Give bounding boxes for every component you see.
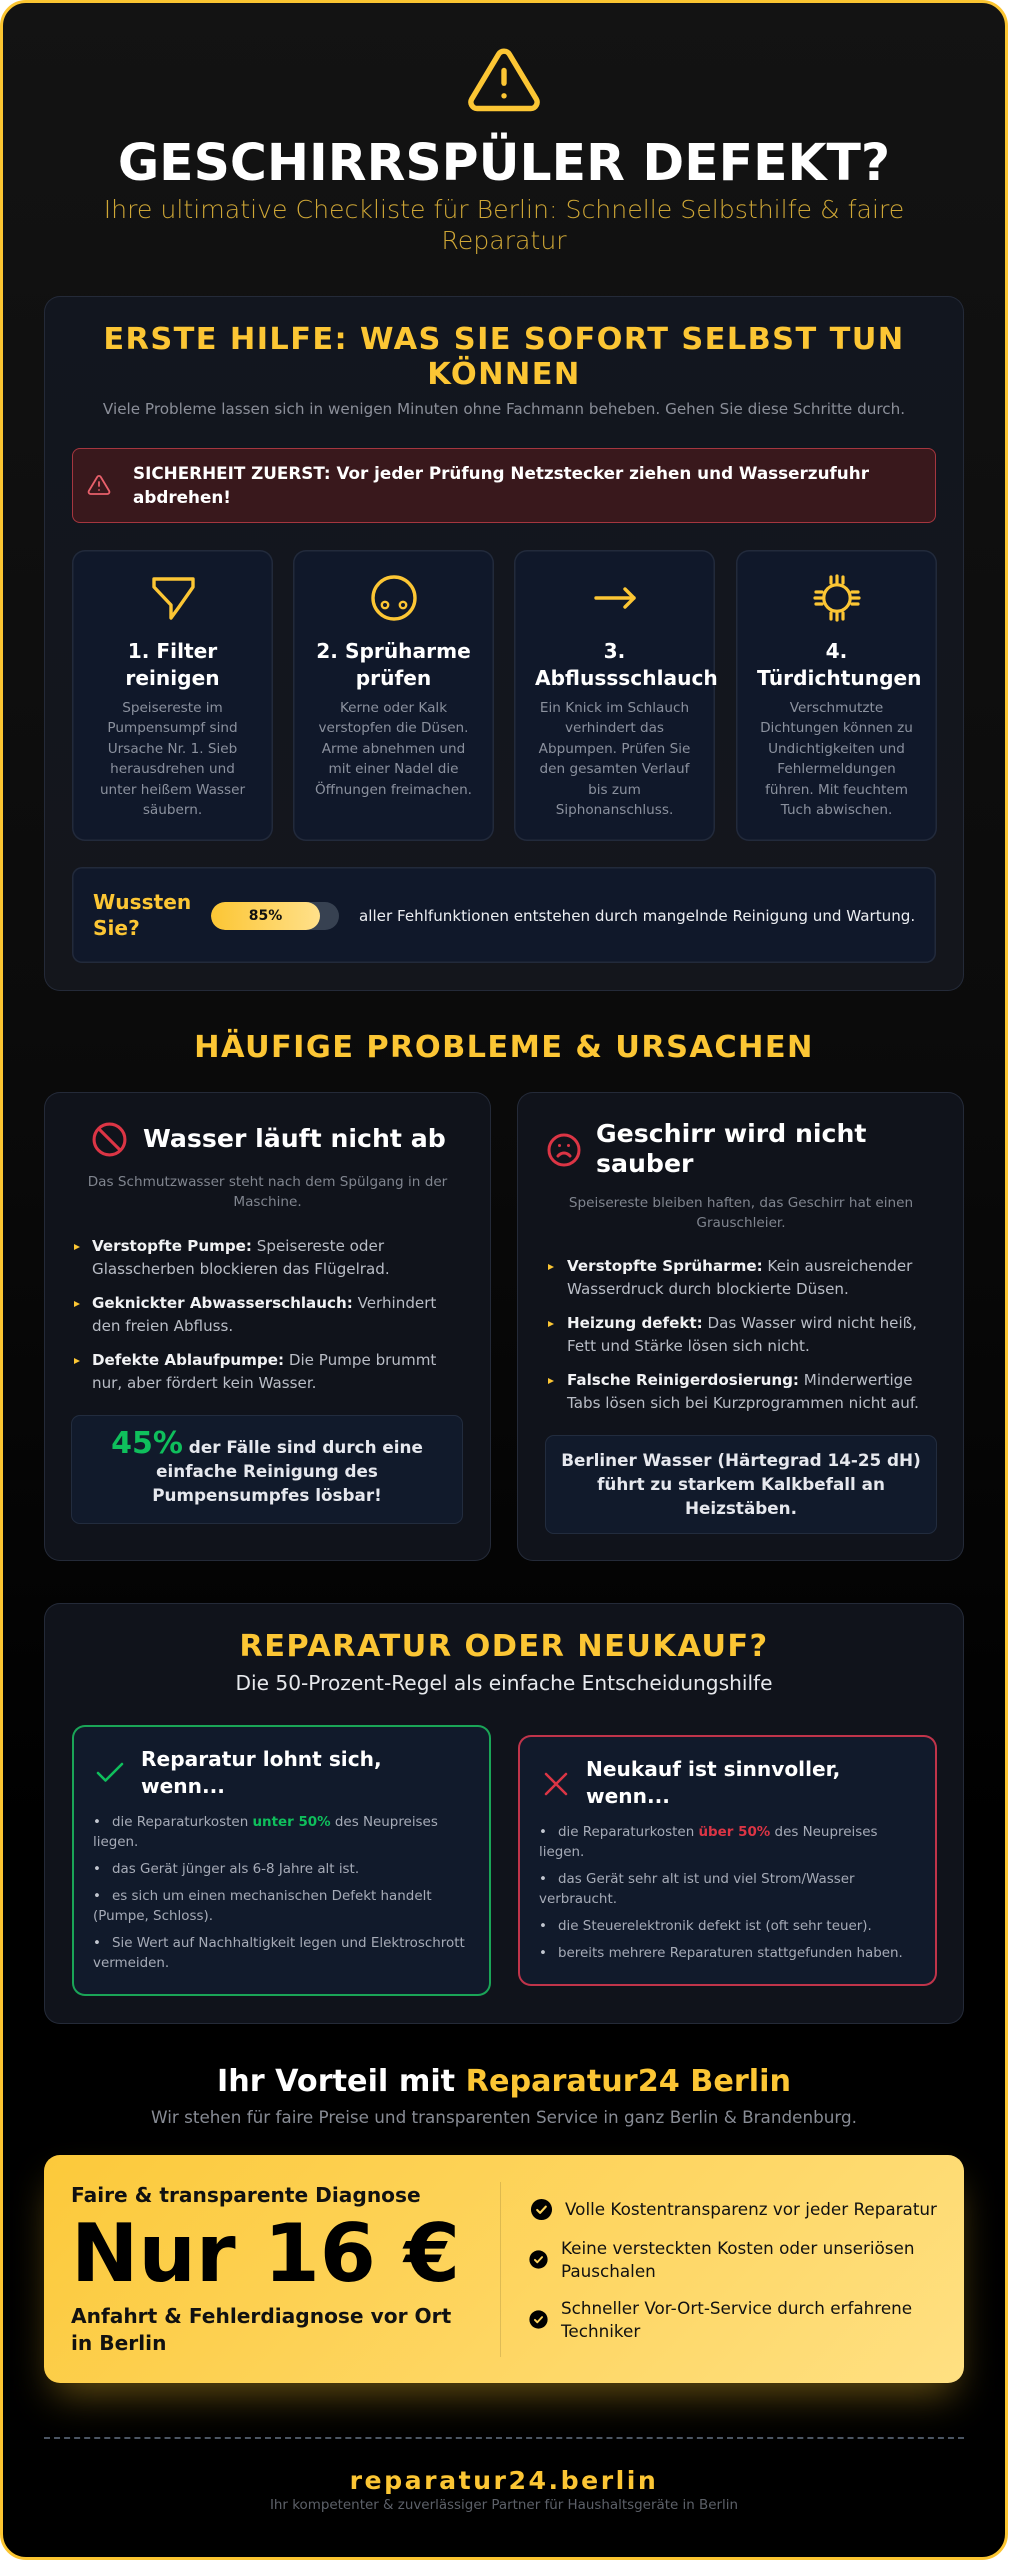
box: Neukauf ist sinnvoller [518,1735,937,1986]
criterion 1 [539,1825,877,1860]
price note: in Berlin [71,2330,166,2354]
cause list [548,1256,919,1412]
problem title: sauber [596,1149,693,1178]
step text: den gesamten Verlauf [540,761,689,777]
step text: Pumpensumpf sind [107,720,238,736]
step title: 1. Filter reinigen [125,638,220,690]
benefit 1: Volle Kostentransparenz vor jeder Reparatur [565,2198,937,2218]
criterion 4: Sie Wert auf Nachhaltigkeit legen und Elektroschrott [112,1936,465,1951]
stat label [93,890,191,940]
cause 2: den freien Abfluss. [92,1316,233,1334]
icon: check circle 3 [529,2310,548,2328]
cause 3: Falsche Reinigerdosierung: Minderwertige [567,1370,913,1388]
heading: Erste Hilfe [103,322,905,392]
cause 3 [566,1370,919,1412]
callout: Berliner Wasser: führt zu starkem Kalkbefall an [597,1474,885,1494]
step card 4 [736,550,937,841]
callout: 45 percent [71,1415,463,1524]
problem title: Wasser läuft nicht ab [143,1124,446,1153]
problem title [596,1119,866,1178]
step text: führen. Mit feuchtem [765,782,908,798]
step text [538,700,690,818]
criterion 3 [93,1889,432,1924]
cause 1: Verstopfte Sprüharme: Kein ausreichender [567,1256,912,1274]
step title: 3. [604,638,625,662]
step text: Ein Knick im Schlauch [540,700,689,716]
icon: check circle 2 [529,2250,548,2268]
icon: alert triangle [88,475,110,495]
cause 2: Geknickter Abwasserschlauch: Verhindert [92,1294,436,1312]
step text: Fehlermeldungen [777,761,896,777]
criterion 1 [93,1815,438,1850]
step text: unter heißem Wasser [100,782,245,798]
callout: Berliner Wasser: Heizstäben. [685,1498,797,1518]
stat label: Sie? [93,916,140,940]
cause 3 [92,1350,436,1392]
criterion 2: verbraucht. [539,1892,617,1907]
criterion 2 [539,1870,903,1910]
cause 2: Fett und Stärke lösen sich nicht. [567,1336,810,1354]
bullet [74,1244,80,1250]
cause 2: Heizung defekt: Das Wasser wird nicht heiß, [567,1314,917,1332]
icon: check [96,1762,124,1782]
cause 2 [567,1314,917,1354]
step text: verstopfen die Düsen. [318,720,468,736]
step text [760,700,913,818]
callout: Berliner Wasser: Berliner Wasser (Härtegrad 14-25 dH) [561,1450,921,1470]
benefit 3 [561,2296,912,2344]
step title [535,638,718,690]
icon: warning triangle [468,48,540,112]
step text: Undichtigkeiten und [768,741,905,757]
criterion 3: • [93,1889,101,1904]
cause 1: Verstopfte Pumpe: Speisereste oder [92,1236,384,1254]
cause 3: Defekte Ablaufpumpe: Die Pumpe brummt [92,1350,436,1368]
icon: filter [152,577,195,620]
icon: cross [544,1772,568,1796]
footer brand: reparatur24.berlin [350,2466,658,2495]
cause 1 [92,1236,390,1278]
box: Reparatur lohnt sich [72,1725,491,1996]
bullet [548,1264,554,1270]
criterion 1: die Reparaturkosten unter 50% des Neupreises [112,1815,438,1830]
text: Vorteil subline: Wir stehen für faire Preise und transparenten Service in ganz Berlin & Brandenburg. [151,2107,857,2127]
problem description: Das Schmutzwasser steht nach dem Spülgang in der [88,1174,447,1190]
subtitle: Ihre ultimative Checkliste für Berlin: Schnelle Selbsthilfe & faire [104,195,904,224]
subtitle: Reparatur [441,226,567,255]
benefit 2: Keine versteckten Kosten oder unseriösen [561,2238,914,2258]
progress fill [211,902,320,930]
problem description [569,1194,913,1231]
progress fill: 85% [249,908,282,924]
step text: Verschmutzte [790,700,883,716]
step text: säubern. [143,802,202,818]
criterion 1: • [539,1825,547,1840]
heading: Erste Hilfe: KÖNNEN [427,356,581,392]
criterion 3: • [539,1919,547,1934]
criterion 2: das Gerät jünger als 6-8 Jahre alt ist. [112,1862,359,1877]
criterion 4: vermeiden. [93,1956,169,1971]
icon: spray nozzle [371,575,417,621]
intro text: Viele Probleme lassen sich in wenigen Minuten ohne Fachmann beheben. Gehen Sie diese Schritte durch. [103,400,905,418]
criteria list [539,1825,903,1961]
problem description: Speisereste bleiben haften, das Geschirr hat einen [569,1194,913,1210]
problem description: Maschine. [233,1194,302,1210]
bullet [74,1300,80,1306]
criterion 3: (Pumpe, Schloss). [93,1909,213,1924]
vertical divider [500,2182,501,2357]
cause 3: nur, aber fördert kein Wasser. [92,1374,316,1392]
cause 3: Tabs lösen sich bei Kurzprogrammen nicht auf. [567,1394,919,1412]
cause 1 [567,1256,912,1298]
panel: price box [44,2155,964,2383]
step card 1 [72,550,273,841]
icon: sad face [548,1134,580,1166]
criterion 4: • [93,1936,101,1951]
box title [586,1756,840,1808]
step text [100,700,246,818]
step text: mit einer Nadel die [328,761,459,777]
heading: Erste Hilfe: ERSTE HILFE: WAS SIE SOFORT SELBST TUN [103,322,905,357]
criteria list [93,1815,465,1971]
cause 2 [92,1294,436,1334]
title: GESCHIRRSPÜLER DEFEKT? [118,133,890,192]
panel: Wasser läuft nicht ab [44,1092,491,1561]
criterion 3: die Steuerelektronik defekt ist (oft sehr teuer). [558,1919,872,1934]
subtitle [104,195,904,255]
benefit 2: Pauschalen [561,2261,656,2281]
box title: Reparatur lohnt sich, [141,1746,382,1770]
step text: bis zum [588,782,641,798]
criterion 2: • [539,1872,547,1887]
step text: Siphonanschluss. [556,802,673,818]
alert text: SICHERHEIT ZUERST: Vor jeder Prüfung Netzstecker ziehen und Wasserzufuhr [133,463,869,483]
callout: Berliner Wasser [545,1435,937,1534]
problem description [88,1174,448,1210]
bullet [74,1358,80,1364]
criterion 4: • [539,1946,547,1961]
step card 2 [293,550,494,841]
step text: verhindert das [565,720,664,736]
box title: wenn... [141,1774,225,1798]
bullet [548,1378,554,1384]
box title [141,1746,382,1798]
step title: Türdichtungen [757,666,922,690]
benefit 3: Schneller Vor-Ort-Service durch erfahrene [561,2298,912,2318]
alert text [133,463,869,506]
icon: ban [92,1122,126,1156]
step title: 4. [826,638,847,662]
step title: 2. Sprüharme prüfen [316,638,471,690]
box title: Neukauf ist sinnvoller, [586,1756,840,1780]
step title [757,638,922,690]
criterion 1: liegen. [539,1845,584,1860]
price kicker: Faire & transparente Diagnose [71,2182,421,2206]
criterion 4 [93,1936,465,1971]
panel: Geschirr wird nicht sauber [517,1092,964,1561]
cause 1: Glasscherben blockieren das Flügelrad. [92,1260,390,1278]
criterion 2: • [93,1862,101,1877]
price: Nur 16 € [71,2207,460,2301]
criterion 4: bereits mehrere Reparaturen stattgefunden haben. [558,1946,903,1961]
icon: door seal [813,574,861,622]
criterion 3: es sich um einen mechanischen Defekt handelt [112,1889,432,1904]
step text: Öffnungen freimachen. [315,782,472,798]
heading: Reparatur oder Neukauf: REPARATUR ODER NEUKAUF? [239,1629,769,1664]
safety alert [72,448,936,523]
step text: Tuch abwischen. [781,802,892,818]
step text: Arme abnehmen und [322,741,465,757]
stat box: Wussten Sie [72,867,936,963]
step text: Ursache Nr. 1. Sieb [108,741,237,757]
step text: Dichtungen können zu [760,720,913,736]
alert text: abdrehen! [133,486,231,506]
benefit 2 [561,2236,914,2284]
heading: Ihr Vorteil: Ihr Vorteil mit Reparatur24 Berlin [217,2064,791,2099]
problem title: Geschirr wird nicht [596,1119,866,1148]
panel: Erste Hilfe [44,296,964,991]
problem description: Grauschleier. [696,1215,786,1231]
icon: check circle 1 [530,2198,553,2220]
step text: Speisereste im [122,700,223,716]
progress bar 85 percent [211,902,339,930]
box title: wenn... [586,1784,670,1808]
step text: Kerne oder Kalk [340,700,447,716]
benefit 3: Techniker [561,2321,640,2341]
callout: 45 percent: Pumpensumpfes lösbar! [152,1485,382,1505]
criterion 1: liegen. [93,1835,138,1850]
step text: herausdrehen und [110,761,235,777]
callout: 45 percent: einfache Reinigung des [156,1461,378,1481]
heading: Häufige Probleme: HÄUFIGE PROBLEME & URSACHEN [194,1030,814,1065]
cause 1: Wasserdruck durch blockierte Düsen. [567,1280,849,1298]
callout: 45 percent: 45% der Fälle sind durch eine [111,1426,423,1461]
step card 3 [514,550,715,841]
subheading: Die 50-Prozent-Regel als einfache Entscheidungshilfe [235,1671,773,1695]
criterion 3 [539,1917,903,1937]
step text [315,700,472,798]
footer tagline: Ihr kompetenter & zuverlässiger Partner für Haushaltsgeräte in Berlin [270,2498,738,2513]
stat text: aller Fehlfunktionen entstehen durch mangelnde Reinigung und Wartung. [359,907,915,925]
criterion 1: • [93,1815,101,1830]
step text: Abpumpen. Prüfen Sie [539,741,690,757]
criterion 1: die Reparaturkosten über 50% des Neupreises [558,1825,877,1840]
criterion 2: das Gerät sehr alt ist und viel Strom/Wasser [558,1872,854,1887]
step title: Abflussschlauch [535,666,718,690]
price note [71,2302,451,2356]
panel: Reparatur oder Neukauf [44,1603,964,2024]
icon: arrow [594,587,636,609]
cause list [74,1236,436,1392]
bullet [548,1320,554,1326]
stat label: Wussten [93,890,191,914]
price note: Anfahrt & Fehlerdiagnose vor Ort [71,2304,451,2328]
